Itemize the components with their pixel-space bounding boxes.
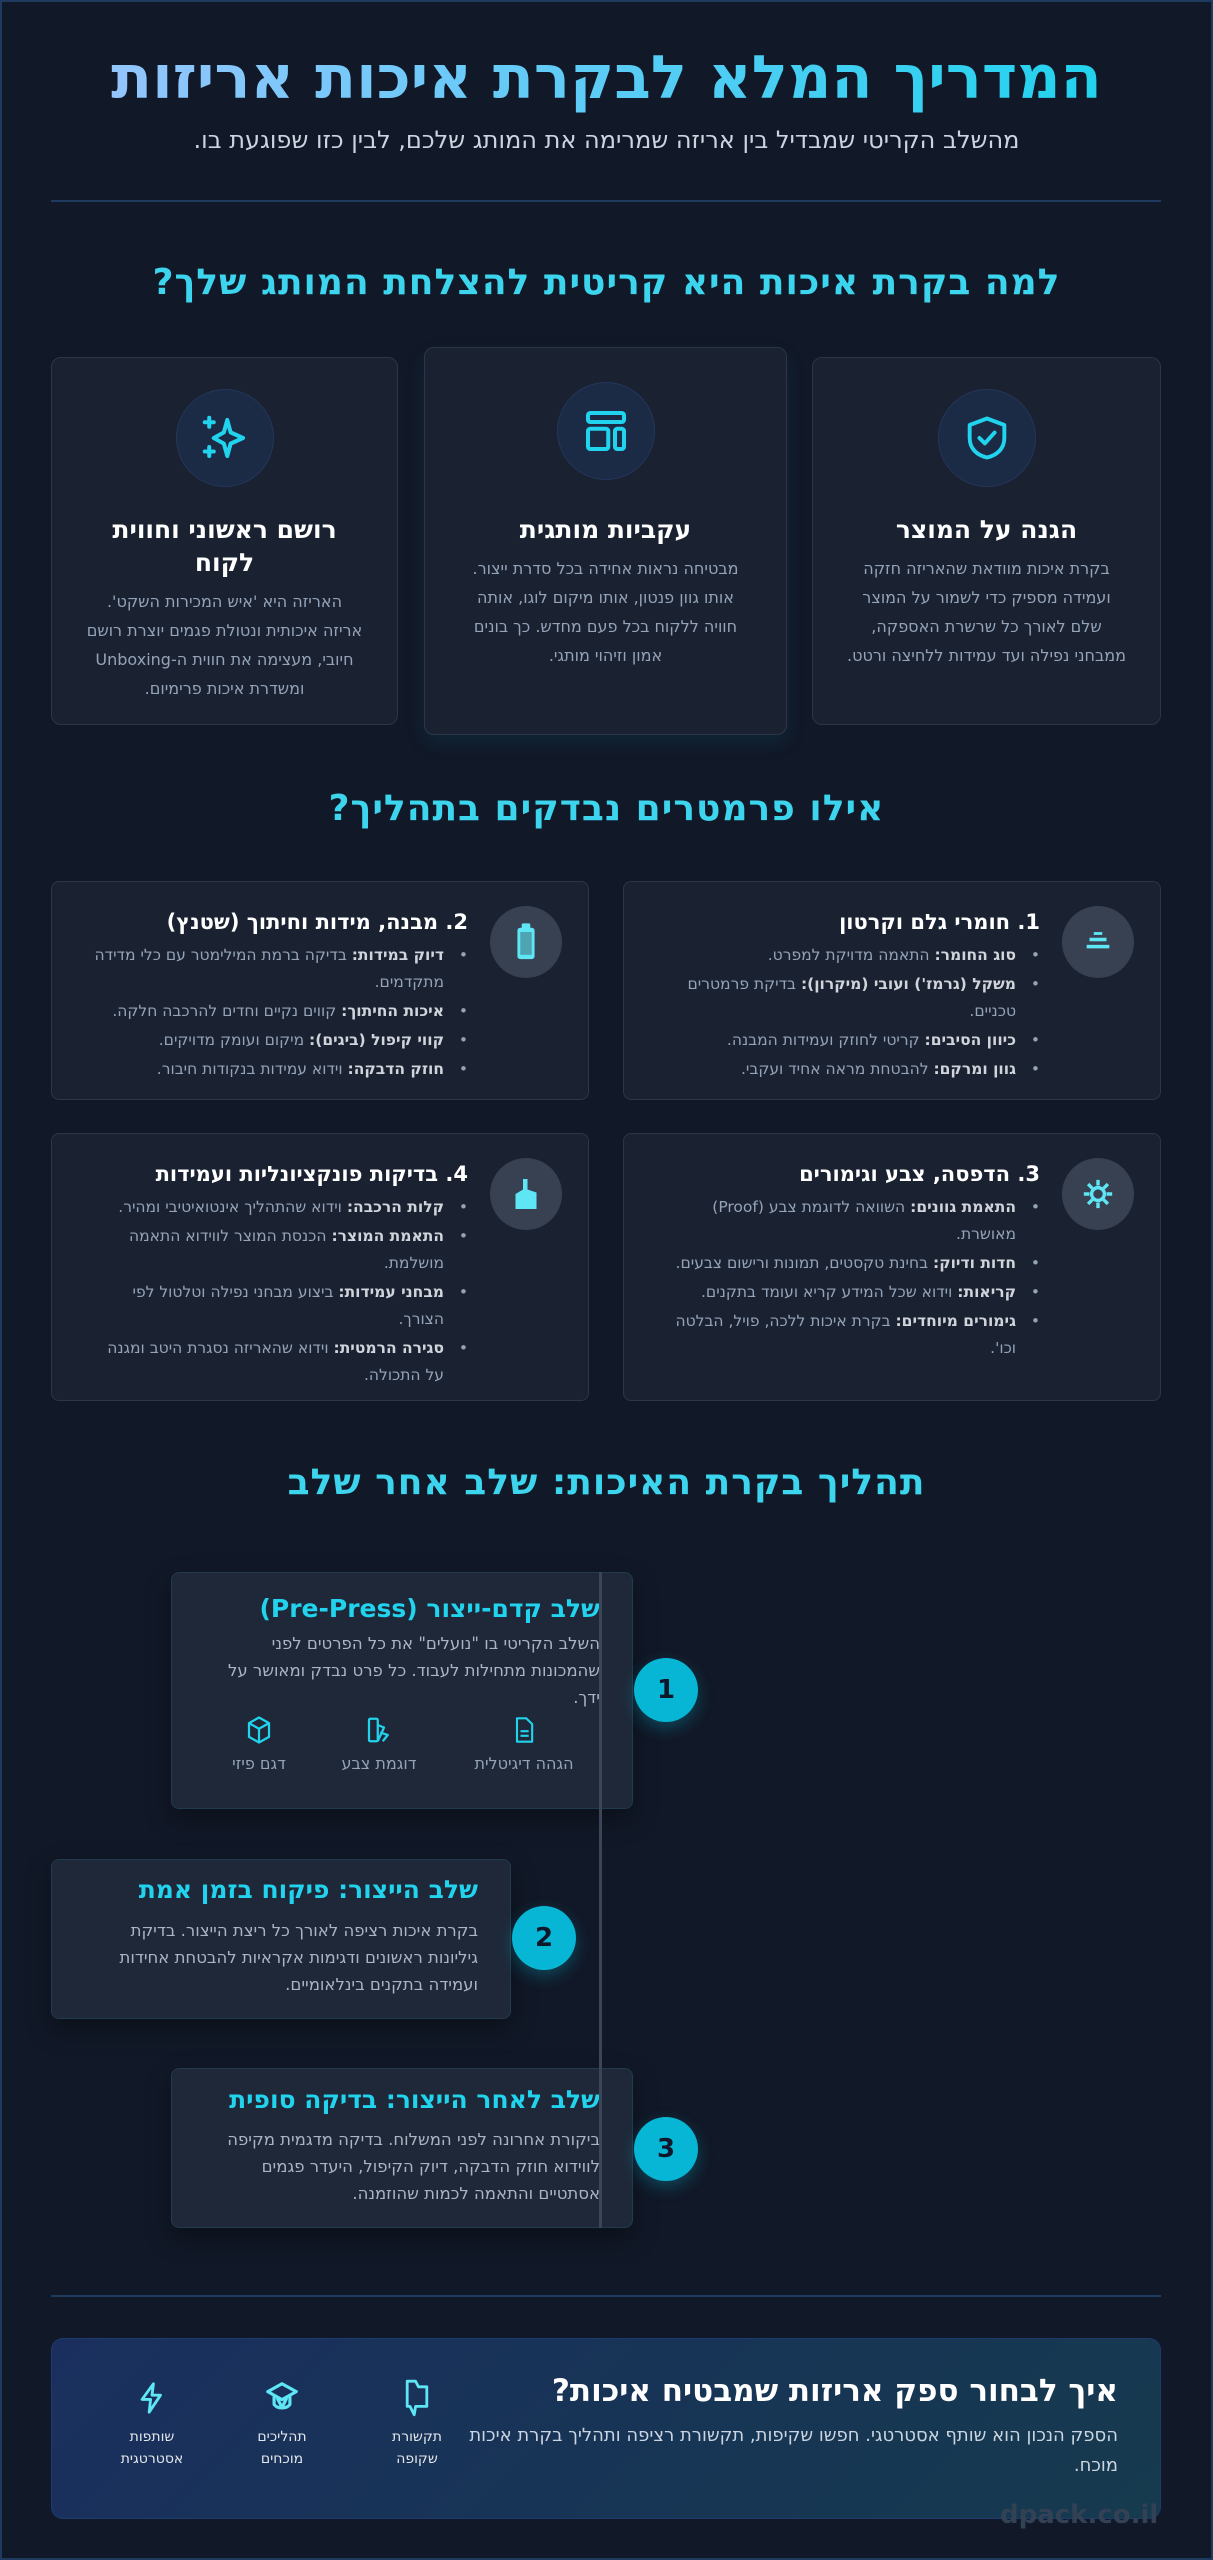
card text: ועמידה מספיק כדי לשמור על המוצר [862, 588, 1111, 607]
heading: process: תהליך בקרת האיכות: שלב אחר שלב [288, 1462, 925, 1503]
timeline card 3 [171, 2068, 633, 2228]
card text: אותו גוון פנטון, אותו מיקום לוגו, אותה [477, 588, 734, 607]
bullet list: גוון ומרקם: להבטחת מראה אחיד ועקבי. [741, 1060, 1016, 1078]
icon: proven processes: תהליכים [257, 2429, 307, 2445]
mini icon: digital proof: הגהה דיגיטלית [474, 1754, 574, 1773]
title: 2. מבנה, מידות וחיתוך (שטנץ) [167, 910, 468, 934]
bullet list: קריאות: וידוא שכל המידע קריא ועומד בתקנים. [701, 1283, 1016, 1301]
card text: חוויה ללקוח בכל פעם מחדש. כך בונים [474, 617, 737, 636]
step number 3 [634, 2117, 698, 2181]
bullet list [107, 1198, 466, 1384]
step number 1: 1 [657, 1675, 675, 1705]
card text [87, 592, 362, 698]
mini icon: color proof: דוגמת צבע [342, 1754, 416, 1773]
icon: transparent communication [392, 2380, 442, 2467]
panel: param 1 [623, 881, 1161, 1100]
panel: param 3 [623, 1133, 1161, 1401]
card text [847, 559, 1126, 665]
card text: ממבחני נפילה ועד עמידות ללחיצה ורטט. [847, 646, 1126, 665]
bullet list: קלות הרכבה: וידוא שהתהליך אינטואיטיבי ומהיר. [118, 1198, 444, 1216]
step title: שלב קדם-ייצור (Pre-Press) [259, 1594, 600, 1623]
card text: אריזה איכותית ונטולת פגמים יוצרת רושם [87, 621, 362, 640]
icon: strategic partnership [120, 2382, 183, 2467]
step text: ביקורת אחרונה לפני המשלוח. בדיקה מדגמית מקיפה לווידוא חוזק הדבקה, דיוק הקיפול, היעדר פגמים אסתטיים והתאמה לכמות שהוזמנה. [227, 2130, 600, 2203]
bullet list: וכו'. [990, 1339, 1016, 1357]
icon: hand [490, 1158, 562, 1230]
card text: שלם לאורך כל שרשרת האספקה, [871, 617, 1102, 636]
bullet list: סוג החומר: התאמה מדויקת למפרט. [768, 946, 1016, 964]
card text: מבטיחה נראות אחידה בכל סדרת ייצור. [473, 559, 738, 578]
card: product protection [812, 357, 1161, 725]
icon: strategic partnership: אסטרטגית [121, 2451, 183, 2467]
card text: בקרת איכות מוודאת שהאריזה חזקה [863, 559, 1110, 578]
bullet list: חוזק הדבקה: וידוא עמידות בנקודות חיבור. [157, 1060, 444, 1078]
mini icon: physical sample [232, 1716, 286, 1773]
card text: אמון וזיהוי מותגי. [549, 646, 662, 665]
mini icon: digital proof [474, 1717, 574, 1773]
mini icon: color proof [342, 1718, 416, 1773]
watermark: dpack.co.il [1000, 2500, 1158, 2530]
icon: transparent communication: שקופה [396, 2451, 438, 2467]
bullet list: התאמת גוונים: השוואה לדוגמת צבע (Proof) [712, 1198, 1016, 1216]
cta text: הספק הנכון הוא שותף אסטרטגי. חפשו שקיפות, תקשורת רציפה ותהליך בקרת איכות מוכח. [469, 2425, 1118, 2476]
title: המדריך המלא לבקרת איכות אריזות [111, 43, 1102, 113]
card title: רושם ראשוני וחווית לקוח [112, 515, 337, 577]
bullet list [94, 946, 466, 1078]
panel: how to choose supplier [51, 2338, 1161, 2519]
panel: param 4 [51, 1133, 589, 1401]
bullet list: כיוון הסיבים: קריטי לחוזק ועמידות המבנה. [727, 1031, 1016, 1049]
bullet list: חדות ודיוק: בחינת טקסטים, תמונות ורישום צבעים. [676, 1254, 1016, 1272]
panel: param 2 [51, 881, 589, 1100]
card title: עקביות מותגית [520, 515, 691, 544]
subtitle: מהשלב הקריטי שמבדיל בין אריזה שמרימה את המותג שלכם, לבין כזו שפוגעת בו. [194, 126, 1019, 154]
step title: שלב לאחר הייצור: בדיקה סופית [229, 2085, 600, 2114]
bullet list: מאושרת. [956, 1225, 1016, 1243]
bullet list: מתקדמים. [375, 973, 444, 991]
bullet list: מבחני עמידות: ביצוע מבחני נפילה וטלטול לפי [132, 1283, 444, 1301]
cta title: איך לבחור ספק אריזות שמבטיח איכות? [552, 2373, 1118, 2409]
timeline card 2 [51, 1859, 511, 2019]
bullet list: על התכולה. [364, 1366, 444, 1384]
icon: sparkle [176, 389, 274, 487]
timeline card 1 [171, 1572, 633, 1809]
icon: proven processes [257, 2382, 307, 2467]
step number 3: 3 [657, 2134, 675, 2164]
icon: proven processes: מוכחים [261, 2451, 303, 2467]
bullet list: איכות החיתוך: קווים נקיים וחדים להרכבה חלקה. [112, 1002, 444, 1020]
bullet list [675, 1198, 1038, 1357]
card: brand consistency [424, 347, 787, 735]
card text [473, 559, 738, 665]
step text: בקרת איכות רציפה לאורך כל ריצת הייצור. בדיקת גיליונות ראשונים ודגימות אקראיות להבטחת אחידות ועמידה בתקנים בינלאומיים. [119, 1921, 478, 1994]
icon: strategic partnership: שותפות [130, 2429, 174, 2445]
bullet list [688, 946, 1038, 1078]
heading: why quality control: למה בקרת איכות היא קריטית להצלחת המותג שלך? [153, 262, 1060, 303]
bullet list: טכניים. [969, 1002, 1016, 1020]
title: 4. בדיקות פונקציונליות ועמידות [156, 1162, 468, 1186]
heading: parameters: אילו פרמטרים נבדקים בתהליך? [329, 788, 884, 829]
step title: שלב הייצור: פיקוח בזמן אמת [139, 1875, 478, 1904]
step number 2: 2 [535, 1923, 553, 1953]
bullet list: מושלמת. [384, 1254, 444, 1272]
card title: הגנה על המוצר [896, 515, 1077, 544]
bullet list: קווי קיפול (ביגים): מיקום ועומק מדויקים. [159, 1031, 444, 1049]
step number 2 [512, 1906, 576, 1970]
bullet list: הצורך. [398, 1310, 444, 1328]
card text: האריזה היא 'איש המכירות השקט'. [107, 592, 342, 611]
icon: layers [1062, 906, 1134, 978]
title: 3. הדפסה, צבע וגימורים [799, 1162, 1040, 1186]
bullet list: גימורים מיוחדים: בקרת איכות ללכה, פויל, הבלטה [675, 1312, 1016, 1330]
bullet list: דיוק במידות: בדיקה ברמת המילימטר עם כלי מדידה [94, 946, 444, 964]
card text: חיובי, מעצימה את חווית ה-Unboxing [95, 650, 354, 669]
icon: layout [556, 382, 654, 480]
step text: השלב הקריטי בו "נועלים" את כל הפרטים לפני שהמכונות מתחילות לעבוד. כל פרט נבדק ומאושר על ידך. [228, 1634, 600, 1707]
step number 1 [634, 1658, 698, 1722]
card: first impression [51, 357, 398, 725]
mini icon: physical sample: דגם פיזי [232, 1754, 286, 1773]
icon: box [490, 906, 562, 978]
icon: gear [1062, 1158, 1134, 1230]
title: 1. חומרי גלם וקרטון [839, 910, 1040, 934]
bullet list: משקל (גרמז') ועובי (מיקרון): בדיקת פרמטרים [688, 975, 1016, 993]
bullet list: התאמת המוצר: הכנסת המוצר לווידוא התאמה [129, 1227, 444, 1245]
bullet list: סגירה הרמטית: וידוא שהאריזה נסגרת היטב ומגנה [107, 1339, 444, 1357]
icon: transparent communication: תקשורת [392, 2429, 442, 2445]
icon: shield [938, 389, 1036, 487]
card text: ומשדרת איכות פרימיום. [145, 679, 304, 698]
